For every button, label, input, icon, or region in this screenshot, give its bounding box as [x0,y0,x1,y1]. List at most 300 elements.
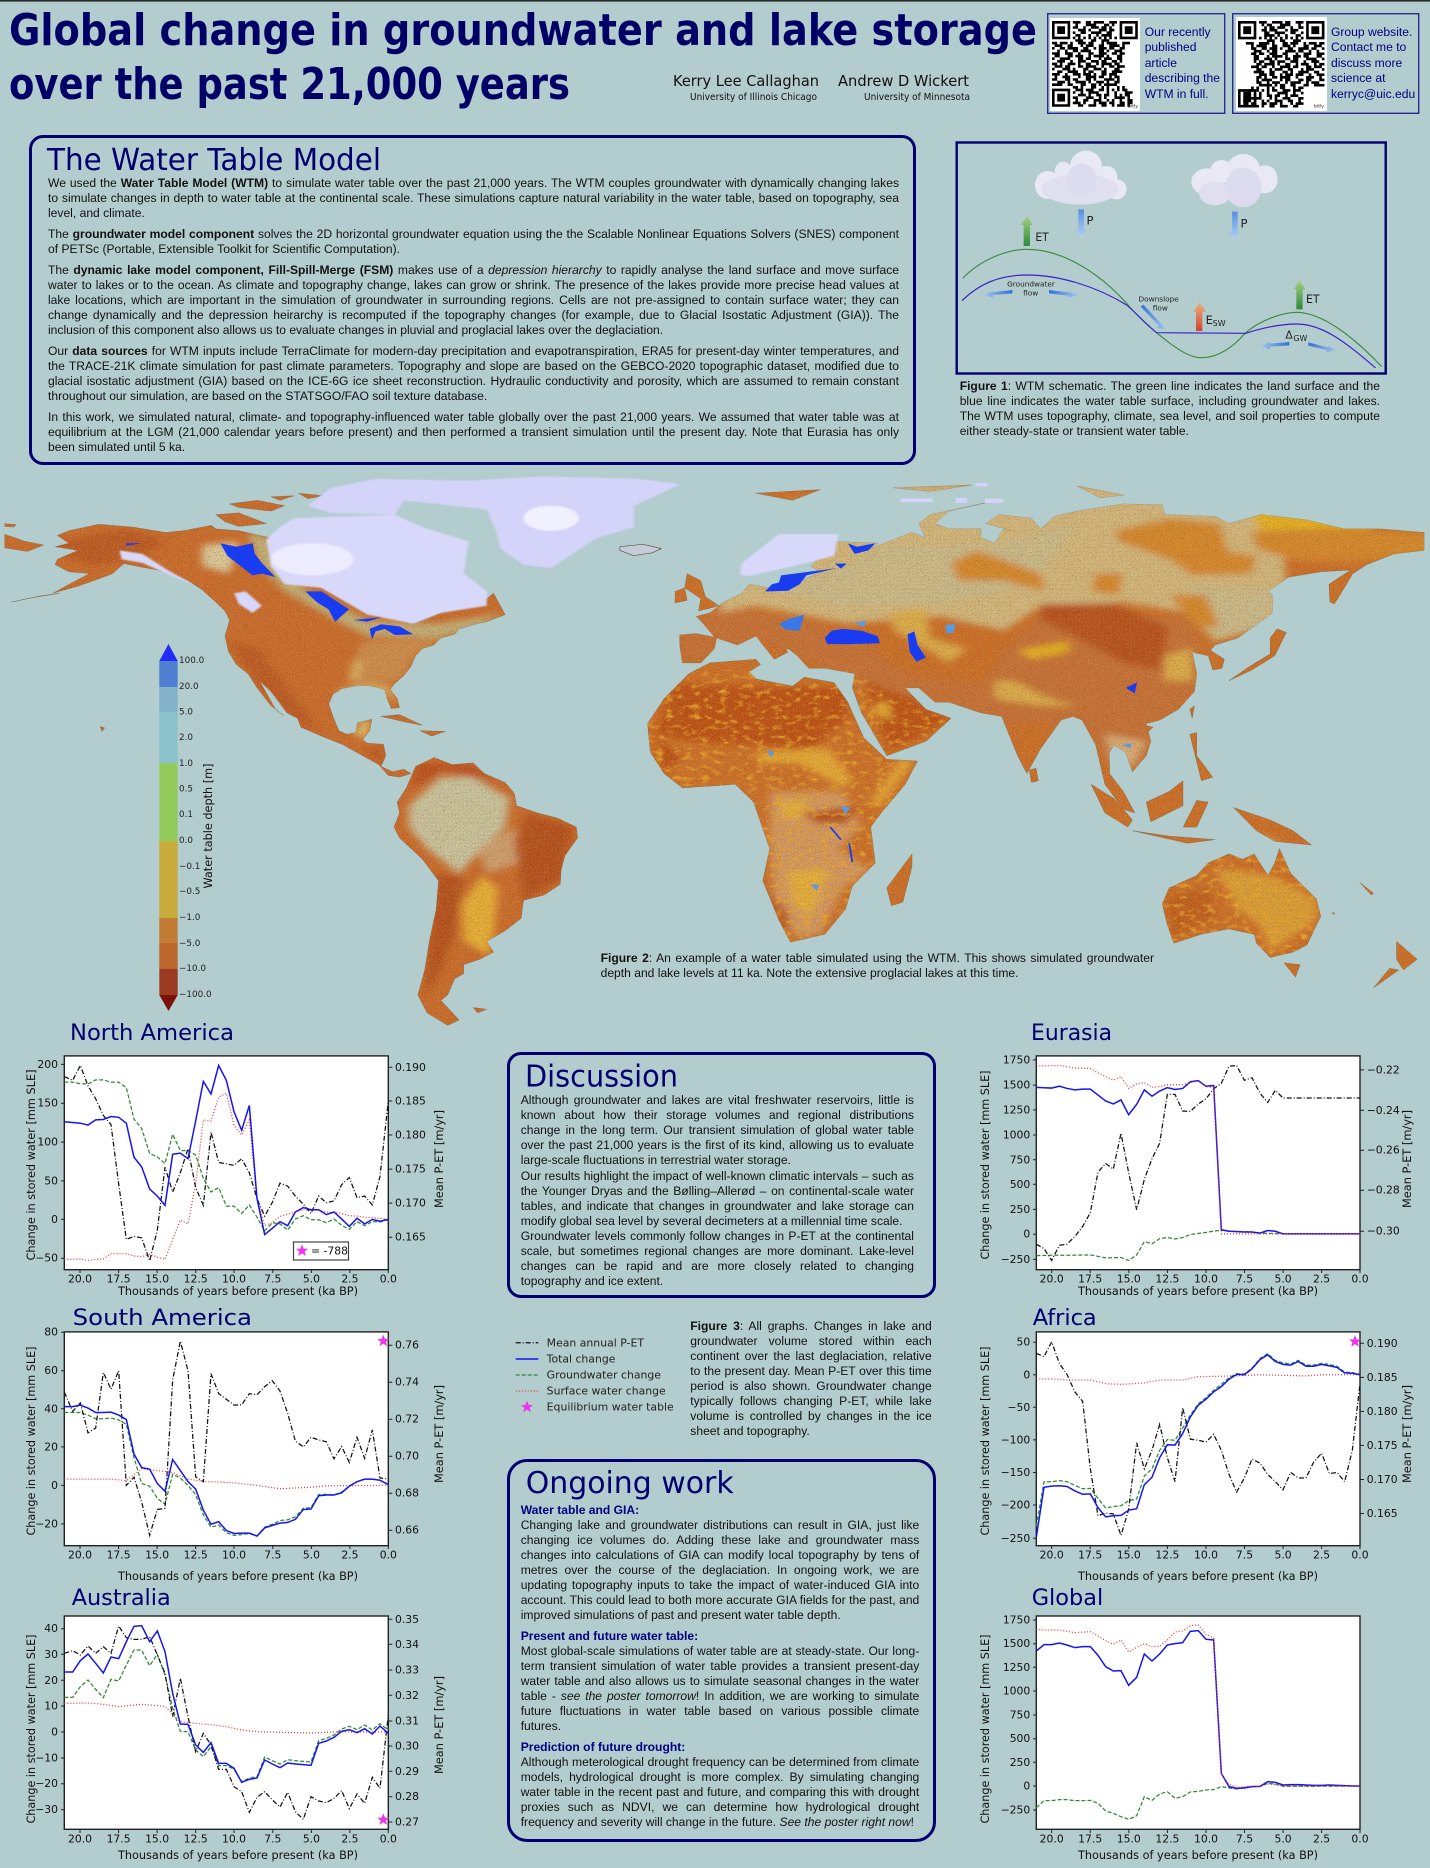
axes labels: 0.0 [1351,1548,1369,1562]
axes labels: Mean P-ET [m/yr] [1401,1385,1414,1483]
axes labels: 2.5 [341,1548,358,1562]
caption: figure 3: sheet and topography. [690,1424,810,1438]
axes labels: 500 [1010,1732,1030,1745]
text: discussion body: Groundwater levels commonly follow changes in P-ET at the continental [521,1228,914,1242]
axes labels: 0.70 [395,1450,419,1463]
axes labels: Thousands of years before present (ka BP) [117,1849,358,1862]
axes labels: 0.0 [380,1272,397,1286]
world map: Americas [5,476,680,1025]
plot area [64,1332,388,1546]
axes labels: 0 [1023,1780,1030,1792]
equilibrium star [377,1813,389,1825]
QR caption: article: published [1145,40,1196,54]
axes labels: 0.66 [395,1524,419,1537]
QR caption: group: kerryc@uic.edu [1331,87,1415,101]
axes labels: 0 [1023,1228,1030,1241]
text: prediction of future drought: frequency and severity will change in the future. See the poster right now! [521,1814,914,1828]
panel: discussion frame [506,1052,936,1298]
axes labels: −0.22 [1367,1063,1400,1076]
colorbar: Water table depth [m] [201,764,215,888]
caption: figure 2 [601,951,1154,980]
text: water table model paragraph 4: glacial isostatic adjustment (GIA) based on the ICE-6G ice sheet reconstruction. Hydraulic conductivity and porosity, which are assumed to remain constant [48,374,899,388]
QR caption: group: discuss more [1331,56,1402,70]
colorbar: −1.0 [179,913,201,923]
authors: University of Minnesota [864,92,970,103]
axes labels: −30 [35,1803,58,1816]
text: present and future water table: water table and also allows us to simulate seasonal changes in the water [521,1674,919,1688]
text: water table model paragraph 3: The dynamic lake model component, Fill-Spill-Merge (FSM) makes use of a depression hierarchy to rapidly analyse the land surface and move surface [48,262,899,276]
plot area [1036,1056,1360,1270]
series [64,1341,388,1536]
axes labels: 0.32 [395,1689,419,1702]
axes labels: 5.0 [303,1832,320,1846]
axes labels: −20 [35,1517,58,1530]
axes labels: −0.24 [1367,1104,1400,1117]
text: water table and GIA: metres over the course of the deglaciation. In ongoing work, we are [521,1562,919,1576]
text: water table model paragraph 4: the TRACE-21K climate simulation for past climate parameters. Topography and slope are based on the GEBCO-2020 topographic dataset, modified due to [48,358,899,372]
axes labels: 7.5 [1236,1548,1253,1562]
text: present and future water table [520,1628,920,1732]
text: prediction of future drought: models, hydrological drought is more complex. By simulating changing [521,1770,919,1784]
schematic labels: GW [1293,334,1308,343]
text: water table and GIA: changing ice volumes do. Adding these lake and groundwater mass [521,1532,919,1546]
text: discussion body: change in the long term. Our transient simulation of global water table [521,1122,914,1136]
QR caption: group [1331,25,1415,101]
axes labels: 0 [51,1726,58,1738]
authors: Kerry Lee Callaghan [673,72,819,90]
axes labels: 0.175 [395,1163,426,1176]
axes labels: 2.5 [1313,1272,1330,1286]
axes labels [979,1053,1414,1298]
axes labels: 7.5 [1236,1832,1253,1846]
axes labels: 0.35 [395,1613,419,1626]
axes labels: 250 [1010,1756,1030,1769]
caption: figure 1: Figure 1: WTM schematic. The green line indicates the land surface and the [960,379,1380,393]
axes labels: 10.0 [1194,1832,1218,1846]
axes labels: 10.0 [1194,1272,1218,1286]
text: water table model paragraph 1: level, and climate. [48,206,145,220]
chart: Africa [979,1305,1414,1583]
axes labels: 2.5 [341,1272,358,1286]
axes labels: 5.0 [1275,1832,1292,1846]
caption: figure 1: The WTM uses topography, climate, sea level, and soil properties to compute [960,409,1380,423]
colorbar: 20.0 [179,682,199,692]
axes labels: 1500 [1003,1637,1030,1650]
North American ice sheet [119,476,680,624]
axes labels: Thousands of years before present (ka BP) [117,1570,358,1583]
caption: figure 3: continent over the last deglaciation, relative [690,1348,932,1362]
text: present and future water table: table - see the poster tomorrow! In addition, we are working to simulate [521,1688,919,1702]
figure 1: WTM schematic [957,142,1386,374]
schematic labels: SW [1213,319,1226,328]
axes labels: 0.72 [395,1413,419,1426]
axes labels: −200 [1001,1498,1030,1512]
text: water table model paragraph 2: The groundwater model component solves the 2D horizontal groundwater equation using the the Scalable Nonlinear Equations Solvers (SNES) component [48,226,899,240]
series [1036,1065,1360,1260]
axes labels: 17.5 [107,1548,131,1562]
colorbar: 0.5 [179,784,193,794]
axes labels: 10 [44,1700,58,1712]
text: water table model paragraph 4: throughout our simulation, are based on the STATSGO/FAO soil texture database. [48,388,487,402]
axes labels: 20.0 [1040,1548,1064,1562]
axes labels: 0.190 [1367,1337,1398,1350]
Iceland [620,544,661,556]
axes labels: 7.5 [264,1548,281,1562]
heading North America: North America [70,1020,234,1046]
chart legend: Mean annual P-ET [547,1336,644,1350]
axes labels: 500 [1010,1178,1030,1191]
axes labels [25,1613,446,1862]
landmass Old World [646,484,1430,988]
schematic labels [1007,214,1320,343]
axes labels: 12.5 [1155,1272,1179,1286]
axes labels: 0.185 [395,1094,426,1108]
schematic labels: flow [1023,288,1038,297]
plot area [64,1056,388,1270]
axes labels [979,1614,1369,1862]
panel: ongoing work frame [506,1459,936,1842]
schematic labels: ET [1035,230,1049,244]
text: prediction of future drought: water table in the recent past and future, and comparing this with drought [521,1784,919,1798]
colorbar: 2.0 [179,733,193,743]
colorbar: 0.1 [179,810,193,820]
axes labels: 0.0 [380,1832,397,1846]
axes labels: 50 [1017,1336,1030,1349]
caption: figure 3 [690,1318,932,1438]
text: water table model paragraph 5: equilibrium at the LGM (21,000 calendar years before present) and then performed a transient simulation until the present day. Note that Eurasia has only [48,424,899,438]
axes ticks [1033,1620,1360,1833]
chart: Global [979,1585,1369,1862]
series [1036,1342,1360,1537]
axes labels: 17.5 [1078,1272,1102,1286]
axes labels: 5.0 [303,1548,320,1562]
chart: Australia [25,1585,446,1862]
text: water table and GIA [520,1502,920,1622]
axes labels: 0.175 [1367,1439,1398,1452]
text: discussion body: Although groundwater and lakes are vital freshwater reservoirs, little is [521,1092,914,1106]
axes labels: 15.0 [1117,1832,1141,1846]
text: present and future water table: futures. [521,1718,561,1732]
heading South America: South America [73,1305,252,1331]
QR caption: group: Contact me to [1331,40,1406,54]
text: water table model paragraph 4 [48,344,899,402]
axes labels: 0.68 [395,1487,419,1500]
axes labels: 12.5 [1155,1548,1179,1562]
colorbar [159,644,215,1011]
text: water table model paragraph 3: lake locations, which are important in the simulation of groundwater in surrounding regions. Cells are not pre-assigned to contain surface water; they can [48,292,899,306]
schematic labels: ET [1306,292,1320,306]
heading Africa: Africa [1033,1305,1097,1331]
text: present and future water table: Most global-scale simulations of water table are at steady-state. Our long- [521,1644,919,1658]
axes labels: 15.0 [145,1548,169,1562]
axes labels: 0.165 [395,1231,426,1244]
text: discussion body: topography and ice extent. [521,1274,663,1288]
cloud left [1035,151,1127,205]
heading Global: Global [1032,1585,1103,1611]
colorbar: −0.5 [179,887,200,897]
colorbar: −5.0 [179,939,201,949]
text: prediction of future drought [520,1740,920,1828]
axes labels: Change in stored water [mm SLE] [25,1634,38,1824]
poster title: over the past 21,000 years [9,59,570,110]
axes labels: 80 [44,1326,58,1339]
authors: Andrew D Wickert [838,72,969,90]
text: discussion body: Our results highlight the impact of well-known climatic intervals – such as [521,1168,914,1182]
text: water table model paragraph 5: In this work, we simulated natural, climate- and topography-influenced water table globally over the past 21,000 years. We assumed that water table was at [48,410,899,424]
axes labels: 0.31 [395,1714,419,1728]
axes labels: Change in stored water [mm SLE] [25,1346,38,1536]
text: discussion body: known about how their storage volumes and regional distributions [521,1108,914,1122]
axes labels [979,1336,1414,1583]
colorbar: 0.0 [179,836,193,846]
chart legend: Equilibrium water table [547,1400,674,1414]
Fennoscandian ice sheet [740,534,839,576]
schematic labels: E [1206,313,1213,327]
text: discussion body: over the past 21,000 years is the first of its kind, allowing us to evaluate [521,1138,914,1152]
text: present and future water table: term transient simulation of water table provides a transient present-day [521,1658,919,1672]
axes labels: 7.5 [264,1832,281,1846]
text: water table model paragraph 2: of PETSc (Portable, Extensible Toolkit for Scientific Computation). [48,242,400,256]
QR panel: group website: bitly [1314,104,1324,110]
axes labels: 0.0 [380,1548,397,1562]
caption: figure 3: typically follows changing P-ET, while lake [690,1394,932,1408]
axes labels [25,1326,446,1583]
axes labels: Thousands of years before present (ka BP) [1077,1570,1318,1583]
equilibrium legend box: = -788 [311,1244,348,1258]
axes labels: 2.5 [1313,1832,1330,1846]
axes labels: 15.0 [145,1272,169,1286]
text: discussion body: scale, but sometimes regional changes are more dominant. Lake-level [521,1244,914,1258]
axes labels: 15.0 [1117,1272,1141,1286]
text: water table model paragraph 2 [48,226,899,256]
axes labels: 0.28 [395,1790,419,1803]
axes labels: 5.0 [1275,1548,1292,1562]
lakes Old World [765,543,1137,693]
text: prediction of future drought: Although meterological drought frequency can be determined from climate [521,1754,919,1768]
text: present and future water table: future fluctuations in water table based on various possible climate [521,1704,919,1718]
chart: North America [25,1020,446,1298]
axes labels: Mean P-ET [m/yr] [433,1676,446,1774]
text: water table model paragraph 3: change dynamically and the depression heirarchy is recomputed if the topography changes (for example, due to Glacial Isostatic Adjustment (GIA)). The [48,308,899,322]
equilibrium legend box [294,1242,348,1260]
axes labels: 0.27 [395,1816,419,1828]
caption: figure 1: either steady-state or transient water table. [960,424,1189,438]
axes labels: 5.0 [1275,1272,1292,1286]
QR caption: article: article [1145,56,1177,70]
axes labels: 10.0 [222,1548,246,1562]
axes ticks [1033,1342,1364,1549]
axes labels: 15.0 [145,1832,169,1846]
axes labels: 20.0 [1040,1832,1064,1846]
QR caption: group: Group website. [1331,25,1412,39]
axes labels: 12.5 [184,1272,208,1286]
text: discussion body [520,1092,914,1288]
land surface line [963,249,1382,367]
axes labels: 7.5 [264,1272,281,1286]
axes labels: 0.185 [1367,1371,1398,1384]
chart legend: Total change [546,1352,616,1366]
axes labels: 0.165 [1367,1507,1398,1520]
chart: Eurasia [979,1020,1414,1298]
axes labels: 0.190 [395,1061,426,1074]
axes labels: 10.0 [1194,1548,1218,1562]
text: prediction of future drought: proxies such as NDVI, we can determine how hydrological drought [521,1800,919,1814]
axes labels: 0.76 [395,1339,419,1352]
axes labels: −150 [1001,1466,1030,1479]
axes labels: 17.5 [107,1832,131,1846]
axes labels: −0.28 [1367,1184,1400,1197]
axes labels: 1750 [1003,1614,1030,1626]
schematic labels: flow [1153,303,1168,312]
axes labels: Mean P-ET [m/yr] [433,1385,446,1483]
axes labels: 1000 [1003,1128,1030,1142]
equilibrium star [377,1335,389,1346]
text: water table and GIA: changes into calculations of GIA can modify local topography by tens of [521,1548,919,1562]
axes labels: 17.5 [1078,1832,1102,1846]
series [64,1626,388,1819]
axes labels: 10.0 [222,1832,246,1846]
axes labels: 20.0 [1040,1272,1064,1286]
axes ticks [61,1619,392,1833]
axes labels: 20.0 [68,1832,92,1846]
axes labels: 200 [37,1058,58,1071]
QR caption: article: Our recently [1145,25,1211,39]
axes labels: 0.180 [395,1128,426,1142]
colorbar: −10.0 [179,964,206,974]
colorbar: 100.0 [179,656,205,666]
axes labels: −50 [1008,1401,1030,1414]
plot area [1036,1616,1360,1829]
panel: water table model frame [29,135,916,465]
axes labels: 0.74 [395,1376,419,1389]
schematic labels: Downslope [1139,295,1179,304]
axes labels: −10 [35,1752,58,1764]
caption: figure 1 [960,379,1380,438]
caption: figure 3: volume is controlled by changes in the ice [690,1408,932,1422]
axes labels: −250 [1001,1532,1030,1545]
poster title: Global change in groundwater and lake storage [9,5,1037,56]
caption: figure 2: depth and lake levels at 11 ka. Note the extensive proglacial lakes at this time. [601,966,1019,980]
series [1036,1625,1360,1819]
axes labels: 40 [44,1402,58,1415]
axes labels: 0 [51,1479,58,1492]
yellow dune veins [646,670,1321,959]
QR panel: published article: bitly [1128,104,1138,110]
axes ticks [61,1332,392,1549]
top edge strip [0,0,1430,2]
axes labels: −0.30 [1367,1225,1400,1238]
axes labels: 0.34 [395,1638,419,1651]
water table line [962,275,1376,368]
axes labels: 0.29 [395,1765,419,1778]
text: water table and GIA: Changing lake and groundwater distributions can result in GIA, just like [521,1518,919,1532]
schematic labels: Δ [1285,328,1293,341]
axes labels: −20 [35,1777,58,1790]
axes labels: 0 [51,1213,58,1226]
text: water table model paragraph 4: Our data sources for WTM inputs include TerraClimate for modern-day precipitation and evapotranspiration, ERA5 for present-day winter temperatures, and [48,344,899,358]
axes labels: 40 [44,1622,58,1635]
axes labels: 12.5 [1155,1832,1179,1846]
chart legend [516,1336,674,1414]
axes labels: 20 [44,1674,58,1687]
axes labels: Change in stored water [mm SLE] [979,1634,992,1824]
axes labels: 20.0 [68,1272,92,1286]
heading: The Water Table Model: The Water Table Model [46,143,381,178]
axes ticks [1033,1060,1364,1273]
chart legend: Surface water change [547,1384,666,1398]
axes labels: 0.180 [1367,1405,1398,1418]
QR panel: published article [1048,14,1225,113]
axes labels: −250 [1001,1804,1030,1816]
text: water table and GIA: Water table and GIA: [521,1502,639,1516]
QR caption: article: WTM in full. [1145,87,1209,101]
caption: figure 3: groundwater volume stored within each [690,1334,932,1348]
axes labels: 12.5 [184,1832,208,1846]
axes labels: 1500 [1003,1079,1030,1092]
landmass Americas [5,493,578,1025]
authors: University of Illinois Chicago [690,92,817,103]
axes labels: 2.5 [341,1832,358,1846]
text: water table and GIA: improved simulations of past and present water table depth. [521,1608,841,1622]
schematic labels: P [1240,217,1248,231]
colorbar: 1.0 [179,759,193,769]
axes labels: Mean P-ET [m/yr] [433,1110,446,1208]
axes labels [25,1058,446,1298]
equilibrium star [1349,1335,1361,1347]
text: discussion body: the Younger Dryas and the Bølling–Allerød – on continental-scale water [521,1184,914,1198]
axes ticks [61,1064,392,1273]
axes labels: 2.5 [1313,1548,1330,1562]
axes labels: 1250 [1003,1103,1030,1116]
axes labels: 5.0 [303,1272,320,1286]
axes labels: 20 [44,1440,58,1453]
axes labels: 0.0 [1351,1832,1369,1846]
axes labels: 750 [1010,1153,1030,1166]
text: discussion body: modify global sea level by several decimeters at a millennial time scale. [521,1214,902,1228]
axes labels: 7.5 [1236,1272,1253,1286]
axes labels: 17.5 [107,1272,131,1286]
caption: figure 3: period is also shown. Groundwater change [690,1378,932,1392]
QR caption: group: science at [1331,71,1385,85]
text: prediction of future drought: Prediction of future drought: [521,1740,685,1754]
text: water table model paragraph 1 [48,176,899,220]
QR caption: article: describing the [1145,71,1220,85]
authors [673,72,970,103]
axes labels: −250 [1001,1253,1030,1266]
axes labels: 1000 [1003,1684,1030,1698]
caption: figure 2: Figure 2: An example of a water table simulated using the WTM. This shows simulated groundwater [601,951,1154,965]
colorbar: −100.0 [179,990,212,1000]
axes labels: Thousands of years before present (ka BP) [117,1285,358,1298]
plot area [64,1616,388,1829]
proglacial lakes [126,543,413,639]
axes labels: Change in stored water [mm SLE] [979,1346,992,1536]
text: present and future water table: Present and future water table: [521,1628,698,1642]
poster title [9,5,1037,110]
axes labels: 1750 [1003,1053,1030,1066]
colorbar: −0.1 [179,862,200,872]
QR caption: article [1144,25,1220,101]
axes labels: 0 [1023,1368,1030,1381]
axes labels: 0.33 [395,1664,419,1676]
text: water table model paragraph 3: water to lakes or to the ocean. As climate and topography change, lakes can grow or shrink. The presence of the lakes provide more precise head values at [48,278,899,292]
axes labels: 750 [1010,1708,1030,1722]
axes labels: Change in stored water [mm SLE] [25,1069,38,1261]
text: water table and GIA: updating topography inputs to take the impact of water-induced GIA into [521,1578,919,1592]
caption: figure 3: to the present day. Mean P-ET over this time [690,1364,932,1378]
text: water table model paragraph 3: inclusion of this component also allows us to evaluate changes in pluvial and proglacial lakes over the deglaciation. [48,322,663,336]
axes labels: 12.5 [184,1548,208,1562]
